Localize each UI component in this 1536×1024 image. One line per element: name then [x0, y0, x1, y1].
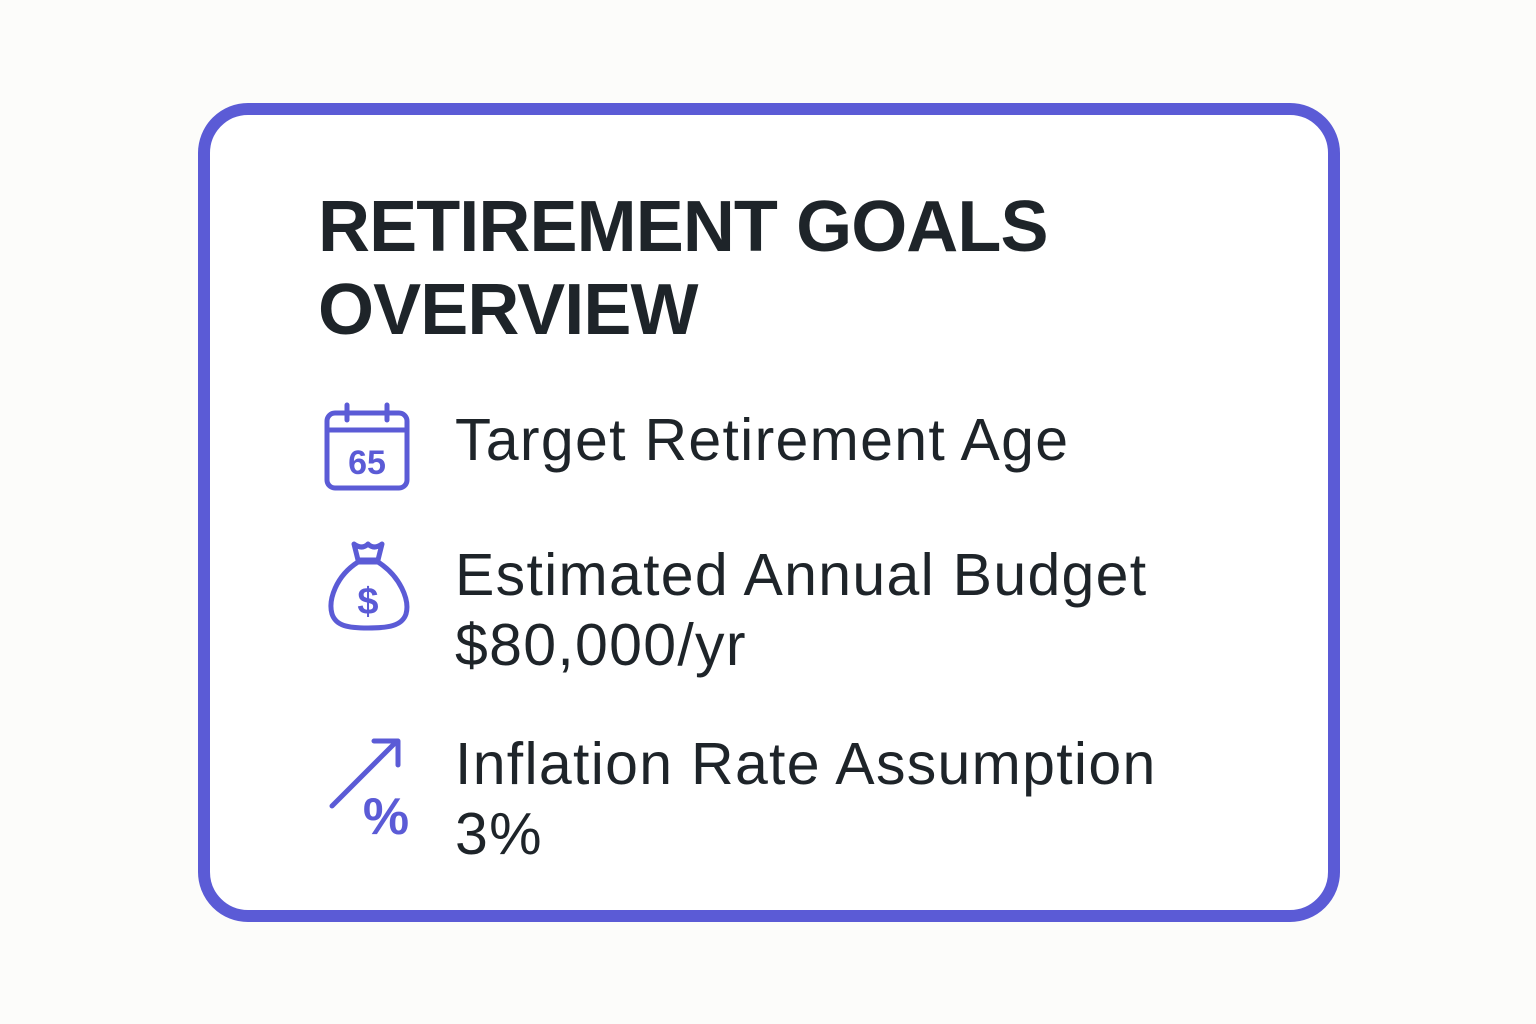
text: target retirement age: Target Retirement Age [455, 407, 1069, 473]
icon: money bag: $ [357, 581, 379, 623]
icon: money bag [328, 542, 410, 630]
text: estimated annual budget [455, 542, 1147, 678]
title: OVERVIEW [318, 270, 698, 350]
panel: retirement goals card [198, 103, 1340, 922]
text: estimated annual budget: Estimated Annual Budget [455, 542, 1147, 608]
text: inflation rate assumption: 3% [455, 801, 543, 867]
text: inflation rate assumption [455, 731, 1157, 867]
text: inflation rate assumption: Inflation Rate Assumption [455, 731, 1157, 797]
title [318, 187, 1048, 350]
icon: calendar 65 [324, 402, 410, 490]
title: RETIREMENT GOALS [318, 187, 1048, 267]
icon: calendar 65: 65 [348, 444, 386, 482]
text: estimated annual budget: $80,000/yr [455, 612, 747, 678]
icon: inflation arrow with percent [330, 738, 409, 838]
